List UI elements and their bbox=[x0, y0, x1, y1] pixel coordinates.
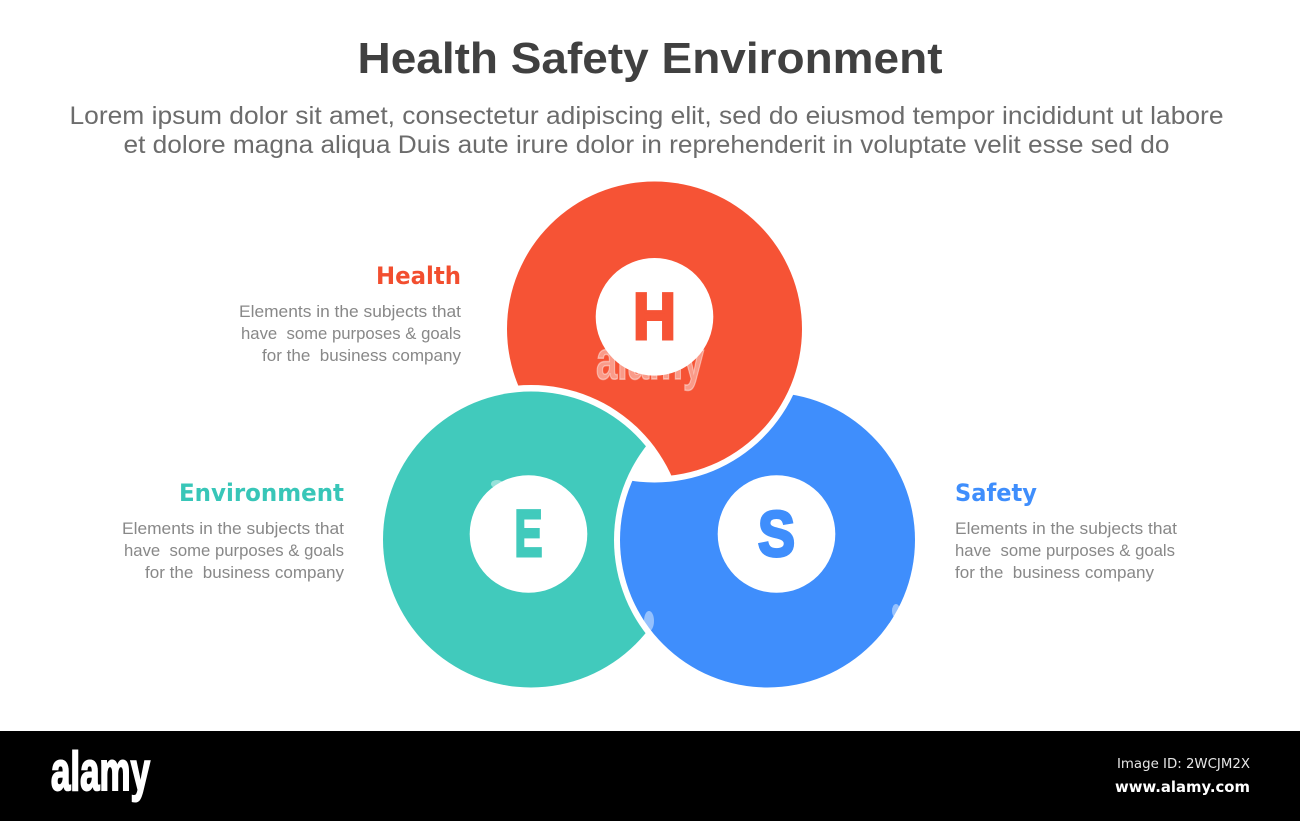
text: Health description: have some purposes & goals bbox=[241, 324, 461, 343]
text: Health description: for the business company bbox=[262, 346, 461, 365]
watermark: alamy bbox=[596, 329, 704, 391]
text: Environment description: have some purposes & goals bbox=[124, 541, 344, 560]
label: Environment: Environment bbox=[179, 479, 344, 507]
label: Environment bbox=[122, 479, 344, 582]
label: Safety: Safety bbox=[955, 479, 1037, 507]
text: Health description: Elements in the subjects that bbox=[239, 302, 461, 321]
badge: E bbox=[470, 475, 587, 593]
label: Health: Health bbox=[376, 262, 461, 290]
segment: safety circle bbox=[620, 392, 915, 688]
text: Environment description bbox=[122, 519, 344, 582]
footer logo: alamy bbox=[51, 740, 150, 802]
text: Safety description: have some purposes & goals bbox=[955, 541, 1175, 560]
text: Safety description: Elements in the subjects that bbox=[955, 519, 1177, 538]
text: Environment description: Elements in the subjects that bbox=[122, 519, 344, 538]
badge: S bbox=[718, 475, 835, 593]
footer bar bbox=[0, 731, 1300, 821]
text: Safety description bbox=[955, 519, 1177, 582]
segment: health circle bbox=[507, 182, 802, 476]
text: Health description bbox=[239, 302, 461, 365]
badge: H: H bbox=[633, 279, 676, 353]
description text: et dolore magna aliqua Duis aute irure dolor in reprehenderit in voluptate velit esse sed do bbox=[124, 131, 1170, 159]
label: Safety bbox=[955, 479, 1177, 582]
segment: environment circle bbox=[383, 392, 646, 688]
description text bbox=[70, 102, 1224, 159]
title: Health Safety Environment bbox=[358, 34, 943, 83]
image id: Image ID: 2WCJM2X bbox=[1117, 756, 1250, 772]
venn diagram bbox=[383, 182, 915, 688]
text: Environment description: for the business company bbox=[145, 563, 344, 582]
label: Health bbox=[239, 262, 461, 365]
website: www.alamy.com bbox=[1115, 778, 1250, 796]
badge: E: E bbox=[514, 496, 542, 570]
badge: S: S bbox=[758, 498, 795, 570]
description text: Lorem ipsum dolor sit amet, consectetur adipiscing elit, sed do eiusmod tempor incididunt ut labore bbox=[70, 102, 1224, 130]
badge: H bbox=[596, 258, 713, 376]
watermark fragments bbox=[491, 480, 900, 631]
text: Safety description: for the business company bbox=[955, 563, 1154, 582]
